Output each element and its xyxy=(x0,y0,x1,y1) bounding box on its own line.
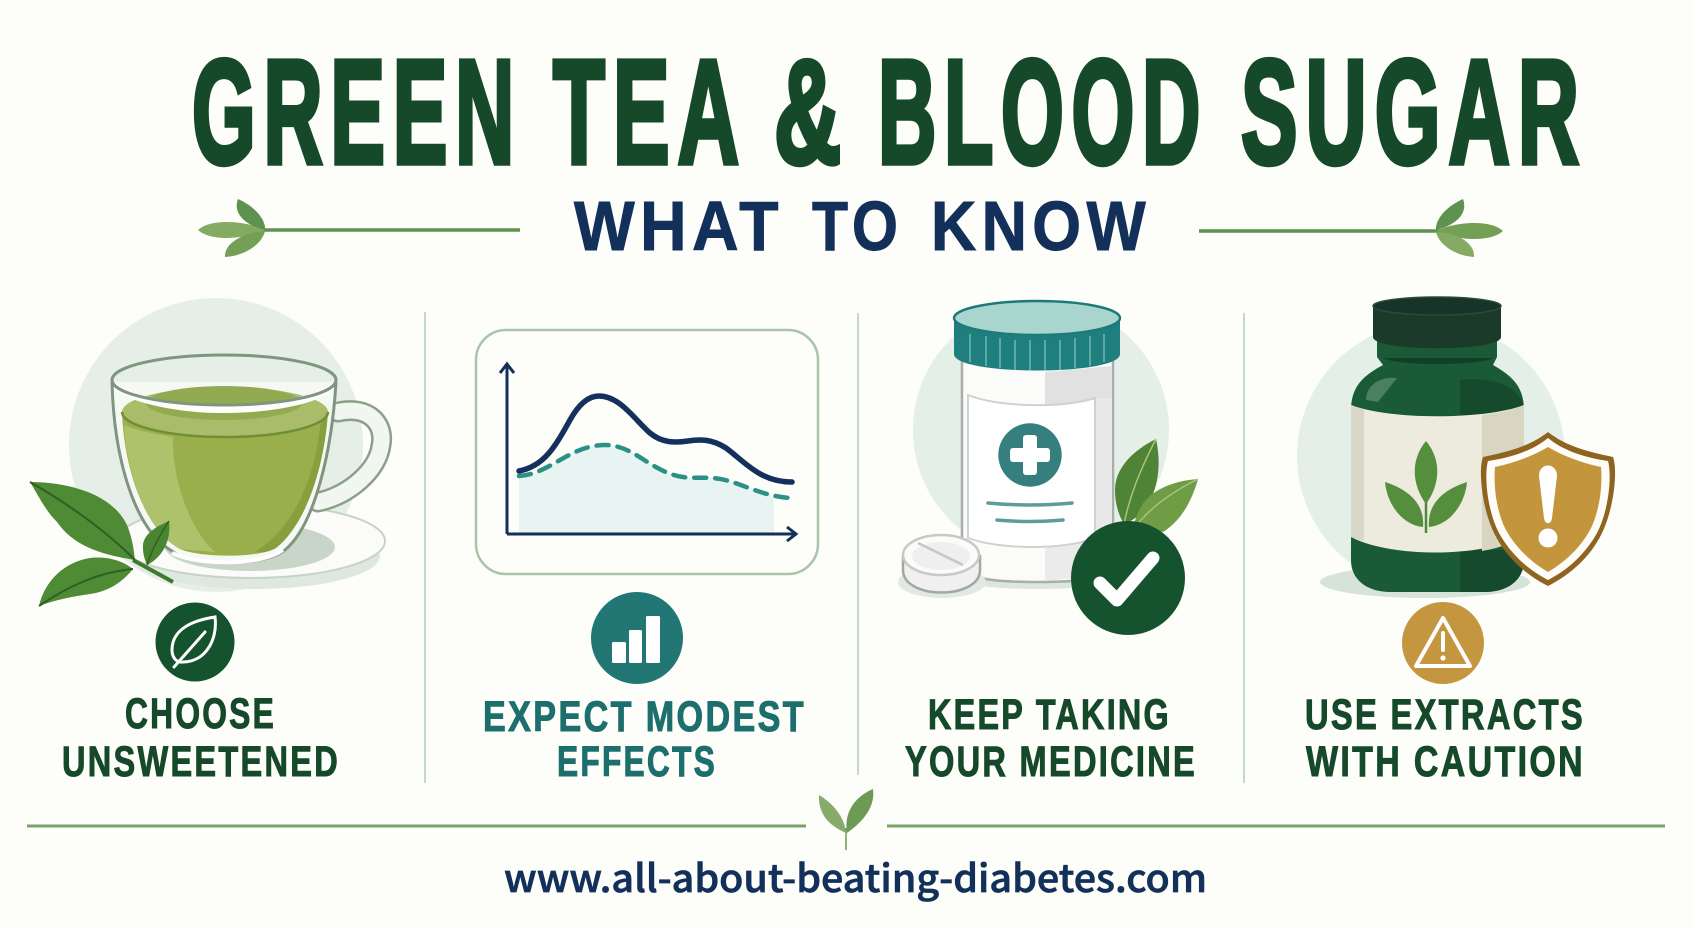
icon: leaves behind check xyxy=(1115,439,1198,532)
panel heading: CHOOSE xyxy=(125,690,276,738)
bottle label xyxy=(1351,405,1524,553)
subtitle: WHAT xyxy=(574,187,784,265)
panel: expect modest effects xyxy=(476,330,818,786)
panel heading: EFFECTS xyxy=(557,738,717,786)
icon: tea cup illustration xyxy=(69,298,385,592)
background circle xyxy=(913,302,1169,558)
panel heading xyxy=(1305,691,1585,786)
dashed curve xyxy=(519,445,792,498)
panel heading xyxy=(62,690,340,786)
panel heading: YOUR MEDICINE xyxy=(905,738,1197,786)
panel: keep taking your medicine xyxy=(898,301,1198,786)
icon: pill xyxy=(898,535,986,598)
title: & xyxy=(774,30,850,195)
subtitle: TO xyxy=(812,187,903,265)
panel heading: KEEP TAKING xyxy=(928,691,1171,739)
label lines xyxy=(988,503,1072,522)
panel heading: UNSWEETENED xyxy=(62,738,340,786)
icon: caution badge xyxy=(1402,602,1484,684)
panel: use extracts with caution xyxy=(1297,297,1615,786)
icon: supplement bottle xyxy=(1320,297,1530,598)
panel heading xyxy=(905,691,1197,786)
right leaf ornament xyxy=(1199,199,1503,257)
bottle lid xyxy=(1373,306,1501,348)
solid curve xyxy=(519,396,792,482)
chart card xyxy=(476,330,818,574)
icon: warning shield xyxy=(1481,432,1615,586)
panel heading: USE EXTRACTS xyxy=(1305,691,1585,739)
bottle lid xyxy=(954,318,1120,370)
title xyxy=(192,30,1587,195)
plant on label xyxy=(1385,441,1467,533)
icon: bar chart badge xyxy=(591,592,683,684)
background circle xyxy=(1297,322,1565,590)
panel heading: WITH CAUTION xyxy=(1306,738,1585,786)
icon: check badge xyxy=(1071,521,1185,635)
title: TEA xyxy=(553,30,747,195)
footer divider with sprout xyxy=(27,789,1665,850)
left leaf ornament xyxy=(198,199,520,257)
icon: tea leaves xyxy=(30,482,173,606)
title: GREEN xyxy=(192,30,522,195)
icon: leaf badge xyxy=(156,602,234,682)
panel heading xyxy=(483,693,806,786)
medical cross xyxy=(998,423,1062,487)
icon: pill bottle xyxy=(952,301,1122,589)
shaded area under dashed curve xyxy=(519,445,774,533)
subtitle: KNOW xyxy=(931,187,1151,265)
panel dividers xyxy=(425,312,1244,783)
axes xyxy=(500,364,796,541)
title: BLOOD xyxy=(878,30,1208,195)
subtitle xyxy=(574,187,1151,265)
panel heading: EXPECT MODEST xyxy=(483,693,806,741)
panel: choose unsweetened xyxy=(30,298,385,786)
footer url: www.all-about-beating-diabetes.com xyxy=(504,848,1207,903)
